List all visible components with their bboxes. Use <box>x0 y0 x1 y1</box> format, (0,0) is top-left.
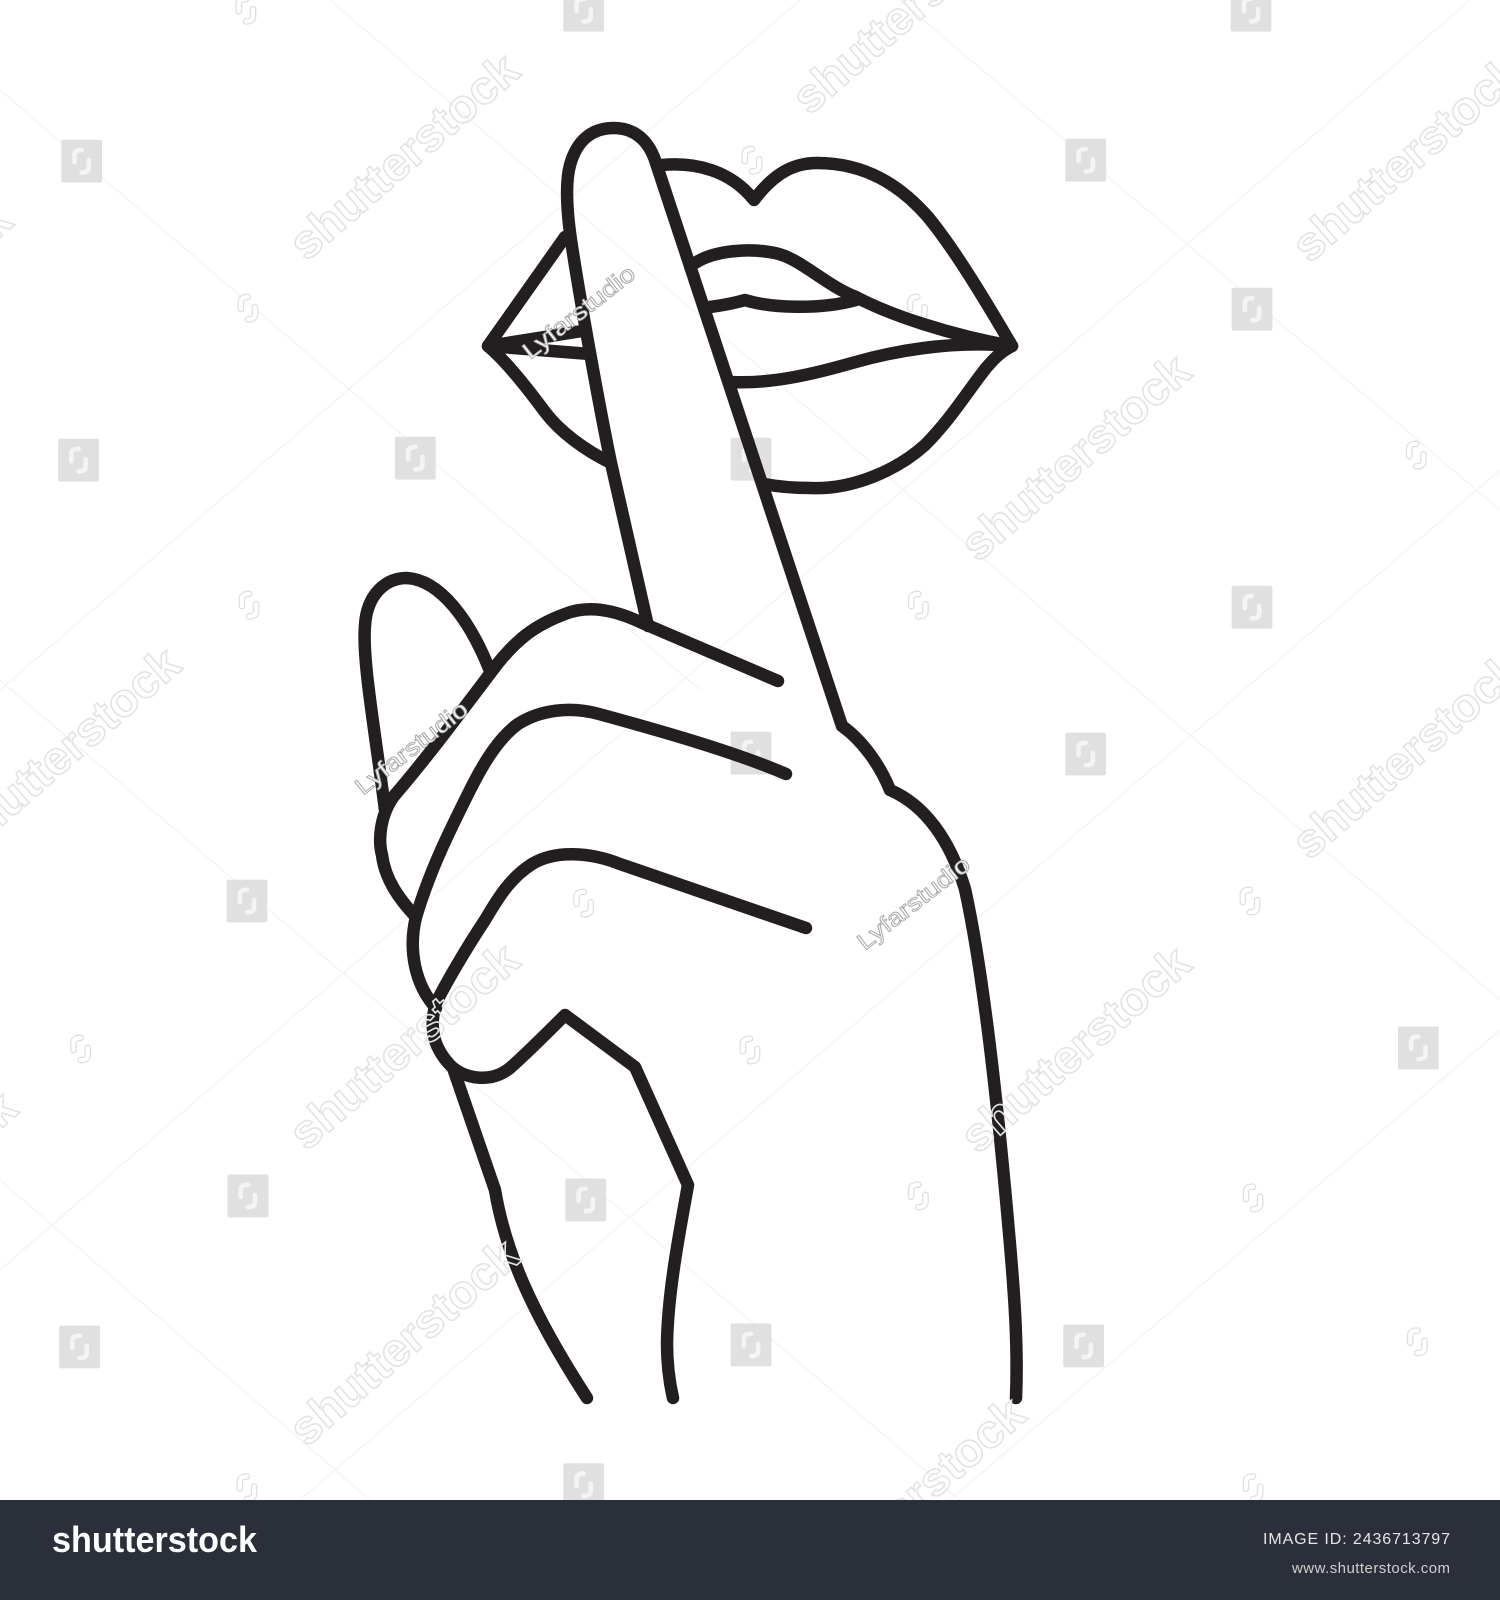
watermark: contributor name <box>350 260 975 955</box>
watermark: shutterstock diagonal text: shutterstock <box>950 343 1201 571</box>
watermark: contributor name: Lyfarstudio <box>517 260 640 364</box>
footer bar <box>0 1500 1500 1600</box>
footer logo: shutterstock <box>52 1519 258 1560</box>
illustration: hand and lips shush gesture <box>365 128 1017 1398</box>
watermark: shutterstock diagonal text: shutterstock <box>279 42 529 270</box>
lips <box>488 163 1012 488</box>
website: www.shutterstock.com <box>1291 1560 1450 1577</box>
image id: IMAGE ID: 2436713797 <box>1263 1531 1450 1548</box>
watermark: contributor name: Lyfarstudio <box>350 696 473 800</box>
watermark: contributor name: Lyfarstudio <box>852 851 975 955</box>
watermark: shutterstock diagonal text: shutterstock <box>279 932 529 1159</box>
watermark: shutterstock diagonal text: shutterstock <box>279 1228 529 1455</box>
watermark: shutterstock diagonal text: shutterstock <box>950 935 1201 1162</box>
hand <box>365 128 1017 1398</box>
